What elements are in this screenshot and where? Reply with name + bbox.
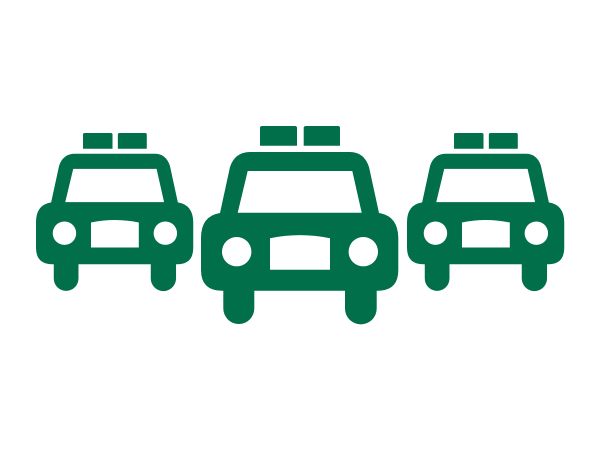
icon: left taxi: [36, 133, 193, 291]
icon: centre taxi: [201, 126, 398, 324]
icon: right taxi: [407, 133, 564, 291]
